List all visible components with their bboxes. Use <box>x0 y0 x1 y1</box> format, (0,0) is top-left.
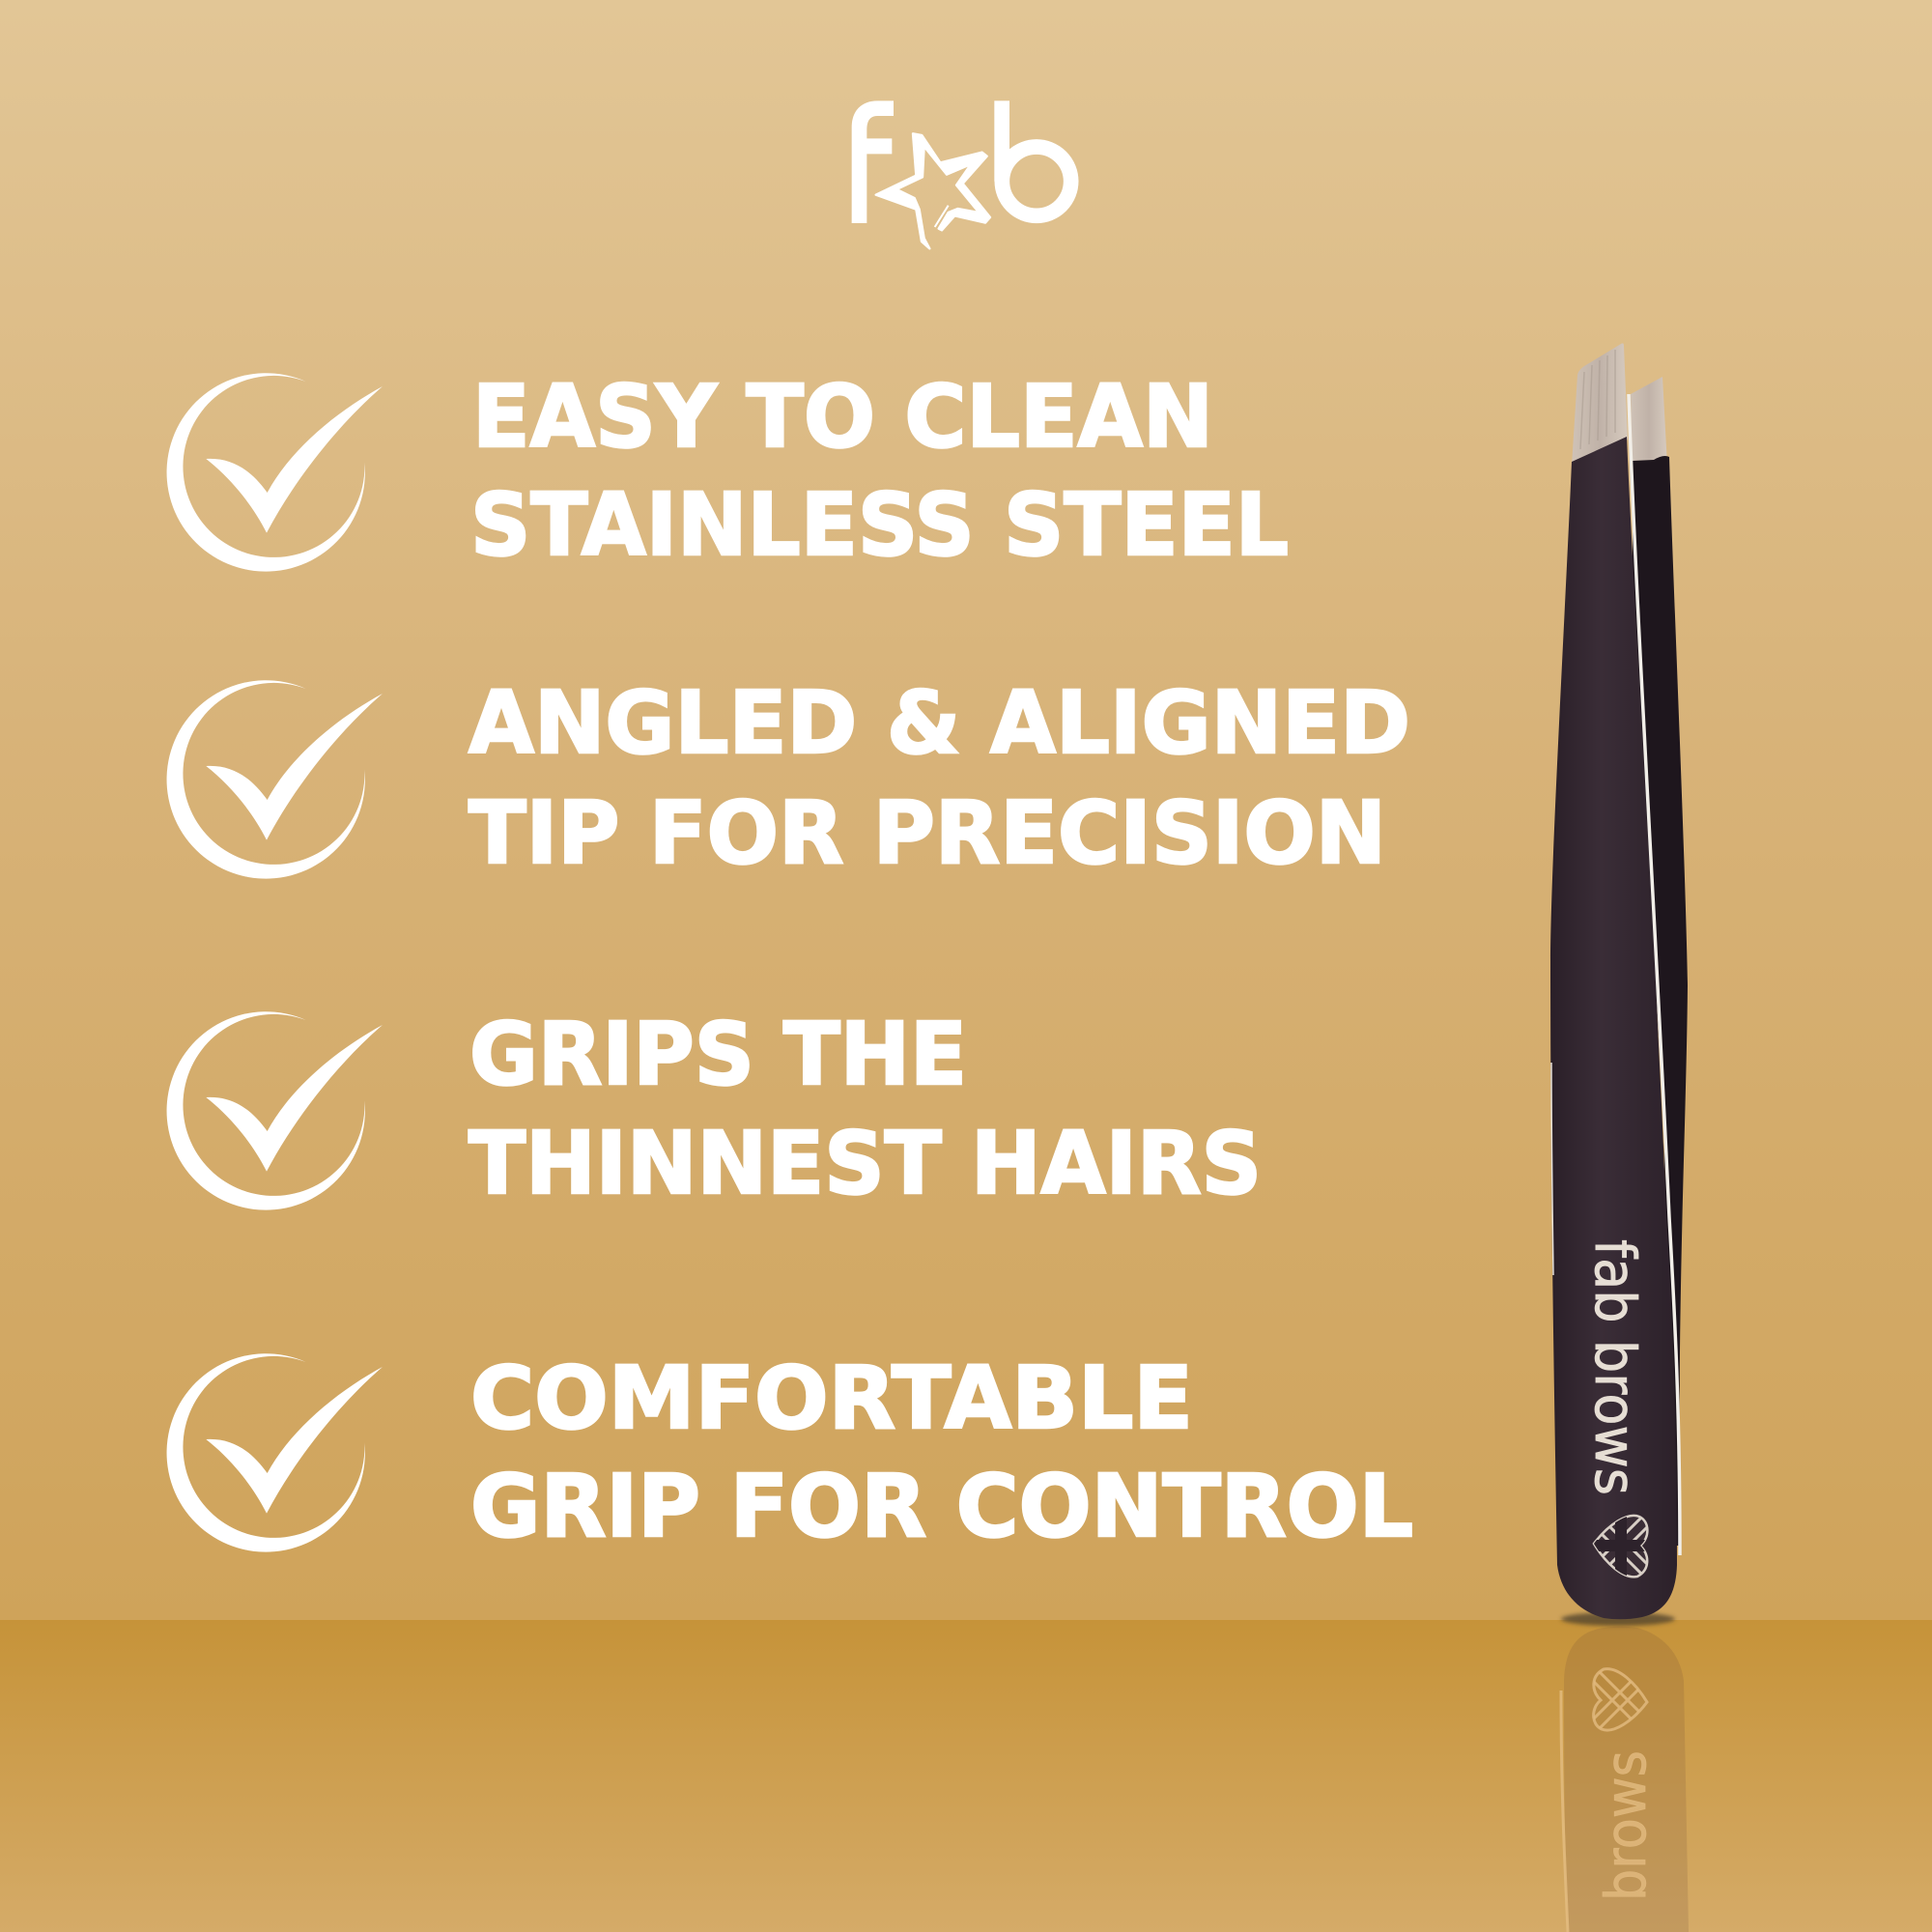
background floor <box>0 1620 1932 1932</box>
tweezers brand text: fab brows <box>1582 1239 1648 1495</box>
heading: easy to clean stainless steel: STAINLESS STEEL <box>470 474 1289 575</box>
heading: comfortable grip for control: GRIP FOR CONTROL <box>470 1456 1413 1556</box>
icon: union jack heart <box>1592 1515 1649 1578</box>
logo star <box>876 133 990 248</box>
heading: angled and aligned tip for precision <box>469 672 1410 883</box>
tweezers reflection: brows <box>1593 1750 1659 1901</box>
feature row 1 <box>167 366 1289 575</box>
icon: check mark 2 <box>167 680 383 879</box>
heading: grips the thinnest hairs <box>469 1004 1262 1213</box>
logo letter f <box>852 100 894 223</box>
icon: check mark 1 <box>167 373 383 572</box>
front arm <box>1550 437 1677 1619</box>
front tip <box>1572 343 1628 466</box>
feature row 3 <box>167 1004 1262 1213</box>
back tip <box>1631 377 1667 466</box>
heading: comfortable grip for control: COMFORTABLE <box>470 1348 1193 1448</box>
logo: fab <box>852 100 1071 248</box>
feature row 2 <box>167 672 1410 883</box>
heading: angled and aligned tip for precision: TIP FOR PRECISION <box>469 782 1386 883</box>
back arm <box>1633 456 1688 1546</box>
heading: grips the thinnest hairs: GRIPS THE <box>469 1004 967 1104</box>
feature row 4 <box>167 1348 1413 1556</box>
tweezers shadow <box>1561 1612 1675 1626</box>
silver edge strip <box>1629 394 1680 1555</box>
logo letter b <box>994 100 1071 215</box>
heading: angled and aligned tip for precision: ANGLED & ALIGNED <box>469 672 1410 773</box>
tweezers product <box>1550 343 1688 1619</box>
tip brushed texture <box>1580 350 1615 449</box>
tweezers reflection <box>1561 1627 1689 1932</box>
heading: grips the thinnest hairs: THINNEST HAIRS <box>469 1113 1262 1213</box>
heading: easy to clean stainless steel <box>470 366 1289 575</box>
icon: check mark 3 <box>167 1011 383 1210</box>
icon: check mark 4 <box>167 1353 383 1552</box>
left edge highlight <box>1551 1063 1553 1275</box>
heading: comfortable grip for control <box>470 1348 1413 1556</box>
heading: easy to clean stainless steel: EASY TO CLEAN <box>472 366 1213 467</box>
